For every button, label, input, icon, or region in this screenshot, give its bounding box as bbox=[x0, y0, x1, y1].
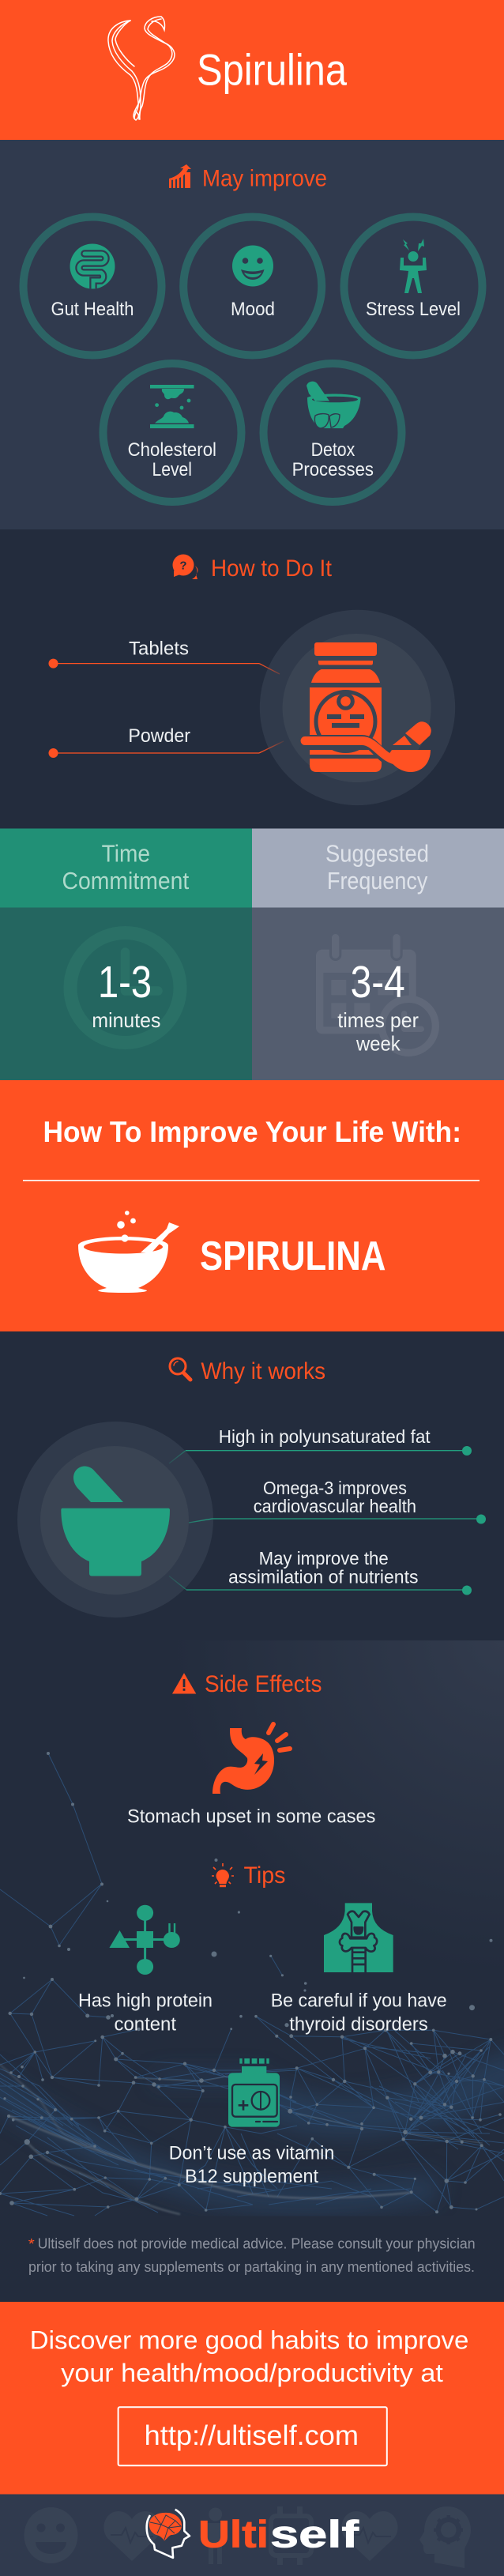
icon: light bulb bbox=[212, 1863, 234, 1887]
value: 1-3 minutes bbox=[92, 957, 160, 1032]
button: ultiself url: http://ultiself.com bbox=[145, 2420, 359, 2451]
value: 1-3 minutes: minutes bbox=[92, 1008, 160, 1032]
heading: tips: Tips bbox=[243, 1862, 285, 1889]
callout: omega-3: cardiovascular health bbox=[254, 1496, 416, 1516]
panel: suggested frequency header: Suggested bbox=[325, 839, 429, 868]
value: 3-4 times per week: week bbox=[355, 1031, 401, 1055]
icon: supplement jar and spoon bbox=[305, 642, 431, 772]
callout: polyunsaturated fat bbox=[169, 1426, 472, 1463]
icon: head with brain bbox=[147, 2510, 190, 2558]
circle item: mood bbox=[183, 217, 322, 356]
label: stress level: Stress Level bbox=[366, 299, 461, 320]
label: cholesterol level: Cholesterol bbox=[128, 439, 216, 461]
panel: network background bbox=[0, 1640, 504, 2216]
icon: molecule bbox=[109, 1905, 180, 1975]
callout: tablets bbox=[49, 638, 280, 674]
icon: stressed person bbox=[400, 239, 427, 293]
panel: disclaimer: Ultiself does not provide medical advice. Please consult your physician bbox=[38, 2235, 476, 2252]
icon: smiley bbox=[232, 245, 273, 286]
callout: omega-3 bbox=[189, 1478, 486, 1523]
icon: warning triangle bbox=[172, 1673, 196, 1694]
value: 3-4 times per week: times per bbox=[337, 1008, 419, 1032]
panel: disclaimer: prior to taking any supplements or partaking in any mentioned activities. bbox=[28, 2258, 475, 2275]
wordmark: self: self bbox=[270, 2514, 359, 2555]
callout: powder bbox=[49, 725, 284, 758]
network nodes bbox=[0, 1752, 502, 2213]
icon backdrop circles bbox=[17, 1422, 213, 1618]
panel: why it works bbox=[0, 1331, 504, 1640]
label: cholesterol level: Level bbox=[152, 459, 192, 480]
logo: ultiself bbox=[147, 2510, 359, 2558]
value: 3-4 times per week: 3-4 bbox=[351, 957, 405, 1007]
icon: clock watermark bbox=[70, 932, 180, 1043]
callout: powder: Powder bbox=[128, 725, 190, 747]
callout: omega-3: Omega-3 improves bbox=[263, 1478, 407, 1498]
icon: white mortar and pestle bbox=[78, 1211, 179, 1293]
icon: thyroid bbox=[324, 1903, 393, 1972]
icon: calendar watermark bbox=[316, 938, 435, 1053]
panel: disclaimer: * bbox=[28, 2235, 35, 2252]
tip: protein bbox=[78, 1905, 213, 2036]
icon: spirulina smoke wisps bbox=[108, 17, 175, 120]
icon backdrop circles bbox=[260, 610, 455, 805]
heading: may improve: May improve bbox=[202, 166, 327, 191]
panel: suggested frequency header: Frequency bbox=[327, 867, 428, 894]
value: 3-4 times per week bbox=[337, 957, 419, 1055]
callout: nutrient assimilation bbox=[169, 1548, 472, 1595]
panel: time commitment header bbox=[0, 828, 252, 907]
panel: how to do it bbox=[0, 529, 504, 828]
icon: question bubbles: ? bbox=[179, 559, 187, 572]
circle item: detox processes bbox=[264, 363, 401, 502]
value: 1-3 minutes: 1-3 bbox=[98, 957, 152, 1007]
tip: vitamin b12 bbox=[169, 2058, 334, 2187]
callout: tablets: Tablets bbox=[129, 638, 189, 659]
icon: intestine bbox=[70, 243, 115, 292]
label: mood: Mood bbox=[231, 299, 275, 320]
footer watermark icons bbox=[24, 2506, 471, 2568]
text: protein: Has high protein bbox=[78, 1990, 213, 2012]
callout: nutrient assimilation: May improve the bbox=[259, 1548, 389, 1569]
panel: time commitment header: Time bbox=[102, 839, 150, 868]
callout: nutrient assimilation: assimilation of nutrients bbox=[228, 1567, 419, 1587]
network light bands bbox=[0, 2065, 482, 2214]
callout: polyunsaturated fat: High in polyunsaturated fat bbox=[219, 1426, 431, 1447]
icon: cholesterol bbox=[150, 385, 194, 428]
panel: time commitment header: Commitment bbox=[62, 867, 190, 894]
title: Spirulina bbox=[197, 44, 348, 95]
panel: side effects bbox=[127, 1671, 375, 1827]
heading: side effects: Side Effects bbox=[205, 1671, 322, 1697]
label: gut health: Gut Health bbox=[51, 299, 134, 320]
text: thyroid: Be careful if you have bbox=[271, 1990, 447, 2012]
button: ultiself url bbox=[118, 2407, 387, 2465]
text: discover more: Discover more good habits to improve bbox=[30, 2326, 468, 2355]
icon: magnifier bbox=[170, 1358, 190, 1380]
panel: suggested frequency header bbox=[252, 828, 504, 907]
panel: time value bbox=[0, 907, 252, 1080]
network haze bbox=[0, 2070, 504, 2199]
icon: rising chart bbox=[169, 164, 191, 188]
text: discover more: your health/mood/productivity at bbox=[61, 2359, 443, 2387]
wordmark: ulti: Ulti bbox=[198, 2514, 269, 2555]
tip: protein: content bbox=[114, 2013, 176, 2036]
circle item: stress level bbox=[344, 217, 482, 356]
panel: disclaimer bbox=[0, 2216, 504, 2302]
label: detox processes: Processes bbox=[292, 459, 374, 480]
circle item: gut health bbox=[24, 217, 161, 356]
icon: stomach with bolt bbox=[213, 1724, 290, 1794]
panel: tips bbox=[78, 1862, 447, 2187]
label: detox processes: Detox bbox=[311, 439, 355, 461]
text: vitamin b12: Don’t use as vitamin bbox=[169, 2143, 334, 2164]
label: cholesterol level bbox=[128, 439, 216, 480]
icon: mortar with leaves bbox=[307, 382, 361, 428]
panel: frequency value bbox=[252, 907, 504, 1080]
panel: call to action bbox=[0, 2302, 504, 2494]
tip: thyroid: thyroid disorders bbox=[289, 2013, 428, 2036]
panel: may improve bbox=[0, 140, 504, 529]
icon: supplement bottle bbox=[228, 2058, 280, 2127]
panel: footer bbox=[0, 2494, 504, 2576]
heading: why it works: Why it works bbox=[201, 1358, 325, 1384]
icon: question bubbles bbox=[172, 555, 197, 579]
panel: how to improve banner bbox=[0, 1080, 504, 1331]
text: stomach upset: Stomach upset in some cases bbox=[127, 1806, 375, 1827]
label: detox processes bbox=[292, 439, 374, 480]
tip: thyroid bbox=[271, 1903, 447, 2036]
heading: how to do it: How to Do It bbox=[211, 555, 333, 582]
heading: how to improve your life with: How To Improve Your Life With: bbox=[43, 1116, 461, 1148]
text: discover more bbox=[30, 2326, 468, 2387]
heading: spirulina: SPIRULINA bbox=[200, 1233, 386, 1279]
circle item: cholesterol level bbox=[103, 363, 242, 502]
header panel bbox=[0, 0, 504, 140]
tip: vitamin b12: B12 supplement bbox=[185, 2166, 318, 2187]
icon: teal mortar and pestle bbox=[61, 1467, 170, 1576]
